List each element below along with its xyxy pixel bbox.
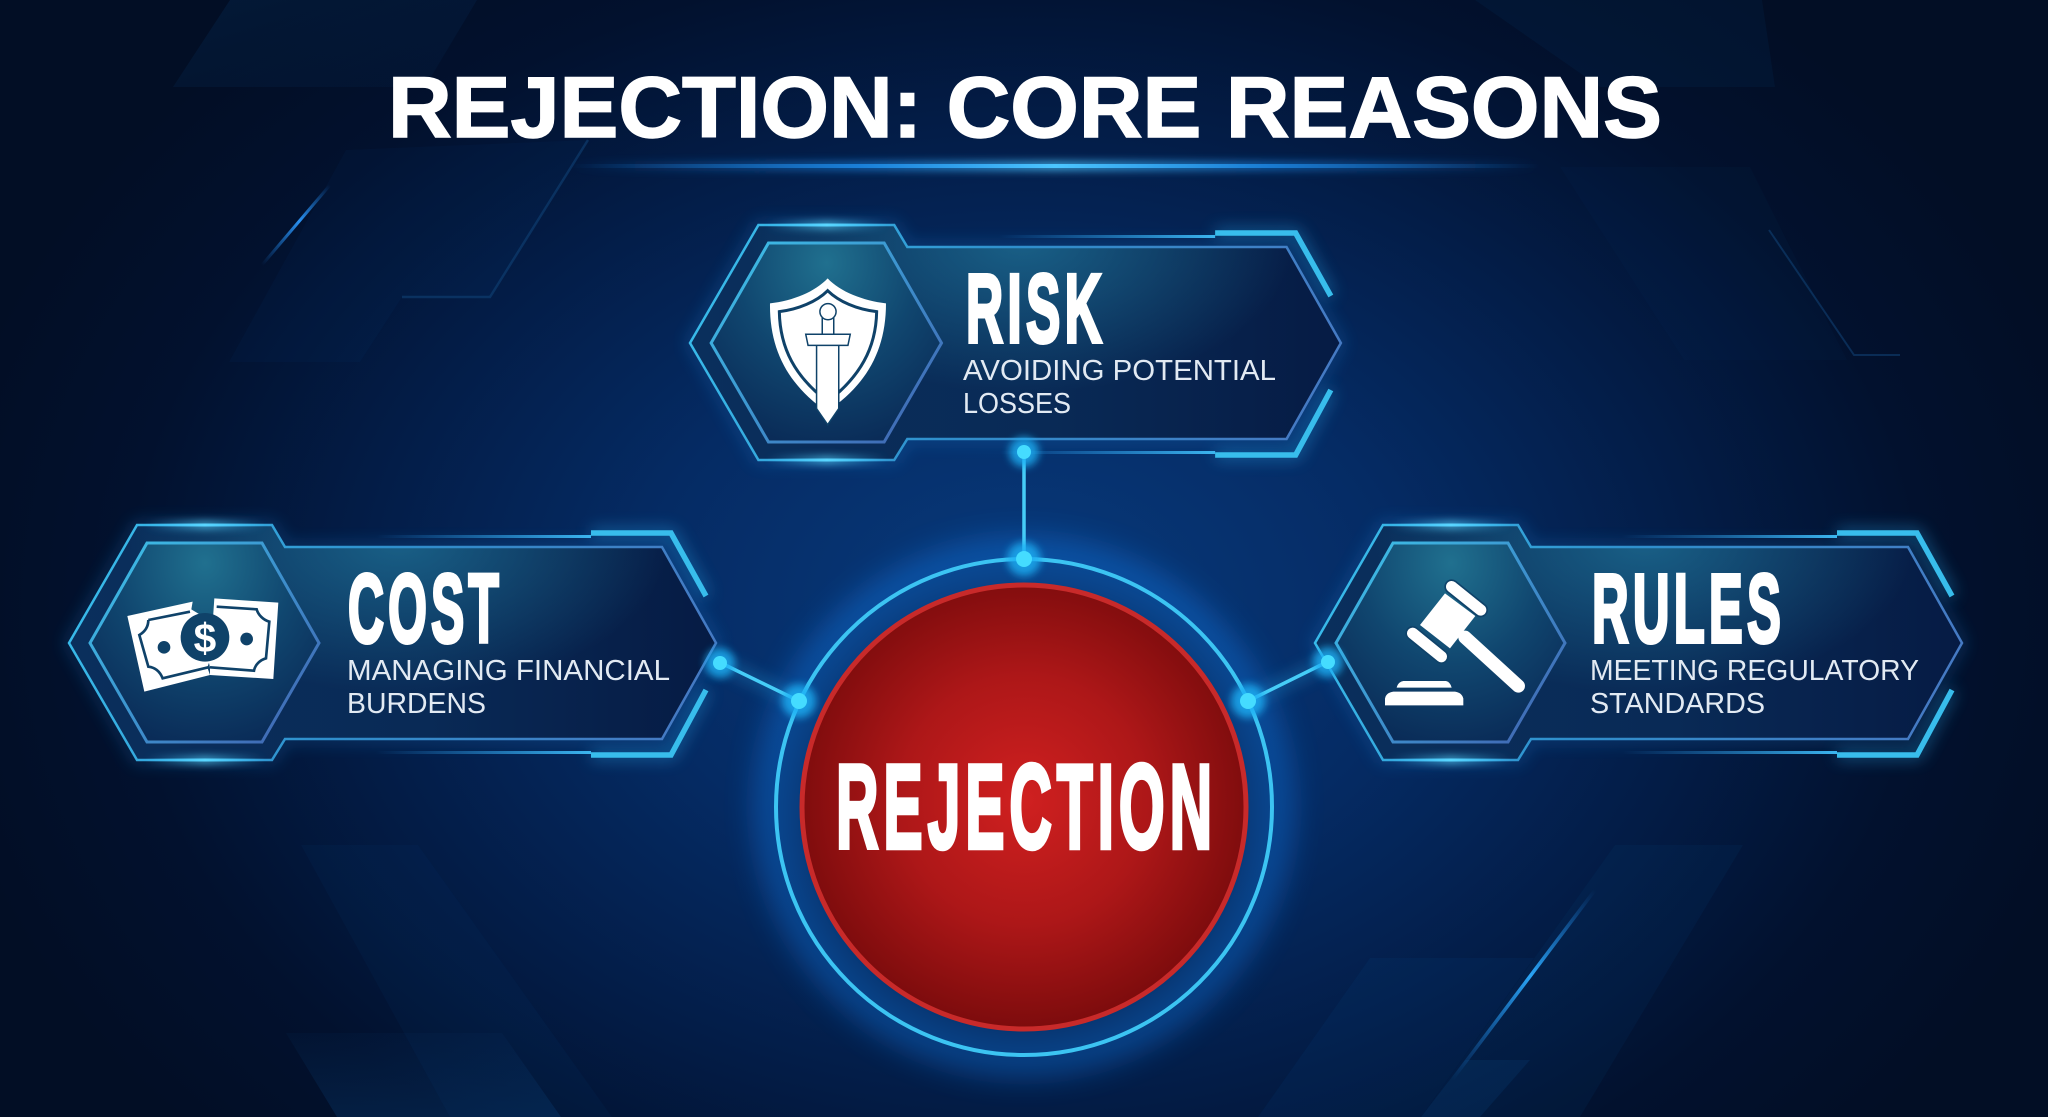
description: rules: MEETING REGULATORY — [1590, 655, 1919, 687]
icon: gavel — [1385, 587, 1518, 705]
description: risk: AVOIDING POTENTIAL — [963, 355, 1276, 387]
description: risk: LOSSES — [963, 388, 1071, 420]
central rejection circle: REJECTION — [836, 740, 1217, 874]
icon: torn banknote: $ — [194, 615, 217, 661]
title underline glow — [570, 161, 1540, 171]
heading: rules: RULES — [1592, 554, 1785, 663]
heading: cost: COST — [348, 554, 503, 663]
description: cost — [347, 655, 670, 720]
connector: cost to center — [721, 663, 799, 701]
panel: risk — [690, 221, 1341, 464]
connector: risk to center — [1020, 452, 1028, 557]
panel: rules — [1315, 521, 1962, 764]
description: rules: STANDARDS — [1590, 688, 1765, 720]
connector nodes — [705, 437, 1343, 718]
description: cost: MANAGING FINANCIAL — [347, 655, 670, 687]
description: cost: BURDENS — [347, 688, 486, 720]
description: risk — [963, 355, 1276, 420]
connector: rules to center — [1248, 662, 1327, 701]
heading: risk: RISK — [966, 254, 1106, 363]
icon: torn banknote — [127, 598, 278, 692]
panel: cost — [69, 521, 716, 764]
description: rules — [1590, 655, 1919, 720]
title: REJECTION: CORE REASONS — [388, 60, 1662, 156]
icon: shield with sword — [770, 278, 886, 423]
central rejection circle — [772, 555, 1276, 1059]
